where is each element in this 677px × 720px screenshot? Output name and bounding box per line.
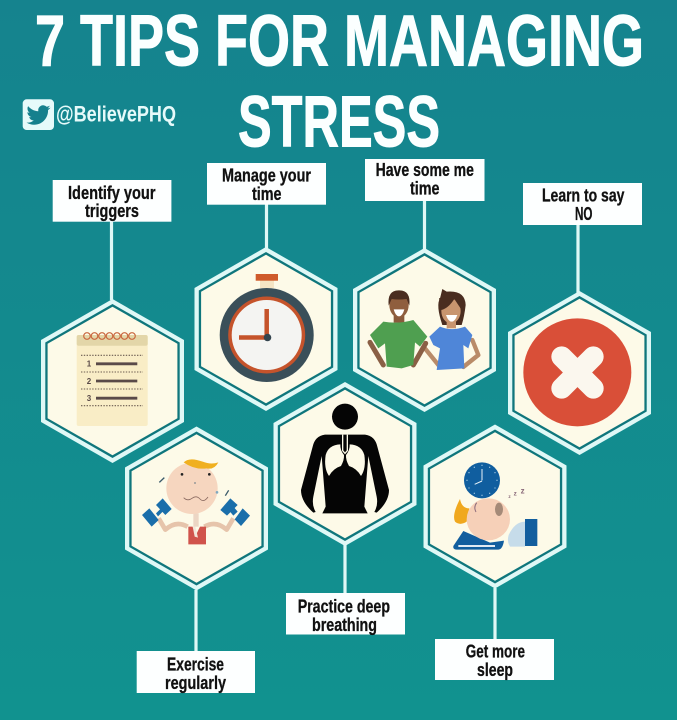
hexagon: stopwatch [194, 247, 338, 411]
icon: notepad checklist: 2 [87, 377, 92, 386]
label: practice deep breathing [286, 593, 405, 635]
icon: body with lungs [301, 404, 389, 513]
icon: sleeping man and clock [453, 462, 537, 550]
hexagon: sleep [424, 424, 566, 588]
hexagon: say no [508, 291, 651, 455]
icon: red cross [523, 318, 631, 426]
icon: man lifting dumbbells [142, 459, 250, 544]
icon: notepad checklist: 1 [87, 360, 92, 368]
label: manage your time: Manage your [222, 166, 311, 186]
hexagon: lungs [274, 382, 416, 546]
label: manage your time [207, 163, 326, 205]
label: practice deep breathing: breathing [312, 615, 377, 635]
label: exercise regularly: regularly [165, 673, 226, 693]
connector stems [112, 201, 578, 652]
twitter handle [23, 99, 176, 130]
icon: notepad checklist [77, 333, 148, 426]
label: identify your triggers [53, 180, 171, 222]
title: STRESS [238, 82, 440, 162]
label: learn to say no: Learn to say [542, 186, 624, 206]
label: get more sleep: Get more [466, 642, 525, 662]
label: identify your triggers: Identify your [68, 183, 156, 203]
label: get more sleep [435, 639, 554, 680]
label: practice deep breathing: Practice deep [298, 597, 390, 617]
label: have some me time [365, 159, 484, 201]
twitter handle: @BelievePHQ [56, 102, 176, 126]
icon: stopwatch [220, 274, 314, 382]
label: have some me time: time [410, 179, 440, 199]
icon: sleeping man and clock: z [521, 486, 525, 495]
label: manage your time: time [252, 184, 282, 204]
icon: notepad checklist: 3 [87, 394, 92, 403]
label: identify your triggers: triggers [85, 201, 139, 221]
icon: two smiling people [370, 289, 478, 370]
label: learn to say no: NO [575, 204, 592, 224]
icon: sleeping man and clock: z [514, 491, 517, 498]
title [35, 2, 644, 162]
label: learn to say no [523, 183, 642, 225]
hexagon: notepad [41, 299, 184, 463]
hexagon: exercise [125, 426, 268, 590]
label: get more sleep: sleep [477, 660, 513, 680]
icon: sleeping man and clock: z [508, 494, 511, 499]
label: exercise regularly: Exercise [167, 655, 224, 675]
label: have some me time: Have some me [376, 160, 474, 180]
label: exercise regularly [137, 651, 255, 693]
hexagon: people [353, 248, 496, 412]
